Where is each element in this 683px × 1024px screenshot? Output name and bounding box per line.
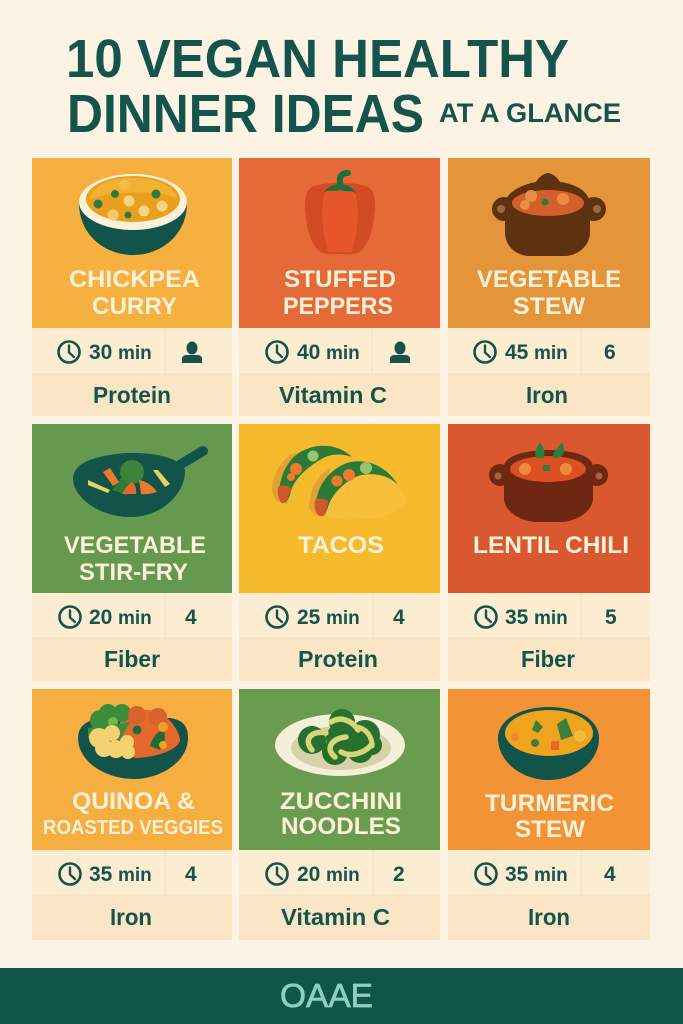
name: TURMERIC [485, 790, 614, 817]
name [280, 788, 402, 840]
servings: 4 [393, 606, 405, 629]
servings: 4 [185, 863, 197, 886]
icon: zucchini plate [275, 709, 405, 776]
name: VEGETABLE [477, 266, 621, 293]
name: STEW [515, 816, 585, 843]
time: 35 [505, 863, 528, 886]
time: min [118, 608, 152, 629]
nutrient: Protein [93, 382, 171, 408]
icon: quinoa bowl [78, 704, 188, 779]
time [266, 606, 360, 629]
name [485, 790, 614, 843]
title: DINNER IDEAS [67, 84, 424, 144]
name: PEPPERS [283, 293, 393, 320]
nutrient: Fiber [521, 646, 575, 672]
time [60, 863, 152, 886]
time [476, 606, 568, 629]
icon: red pepper [305, 173, 375, 254]
time [476, 863, 568, 886]
name: STEW [513, 293, 585, 320]
servings: 4 [604, 863, 616, 886]
footer [0, 968, 683, 1024]
name: CURRY [92, 293, 177, 320]
time: 25 [297, 606, 320, 629]
card: stuffed peppers [239, 158, 440, 416]
time: 35 [89, 863, 112, 886]
name: NOODLES [281, 813, 401, 840]
icon: stew pot [492, 173, 606, 256]
name: LENTIL CHILI [473, 532, 629, 559]
name: STUFFED [284, 266, 396, 293]
icon: curry bowl [79, 174, 187, 255]
name [64, 532, 206, 586]
nutrient: Protein [298, 646, 378, 672]
servings: 5 [605, 606, 617, 629]
time [58, 341, 152, 364]
name: QUINOA & [72, 788, 195, 815]
title: 10 VEGAN HEALTHY [66, 29, 569, 89]
card: quinoa and roasted veggies [32, 689, 232, 940]
nutrient: Fiber [104, 646, 160, 672]
time: min [534, 343, 568, 364]
icon: turmeric bowl [498, 707, 599, 780]
servings: 4 [185, 606, 197, 629]
icon: chili pot [489, 442, 608, 522]
name: ZUCCHINI [280, 788, 402, 815]
time [474, 341, 568, 364]
time: 30 [89, 341, 112, 364]
card: zucchini noodles [239, 689, 440, 940]
card: vegetable stir-fry [32, 424, 232, 681]
name: ROASTED VEGGIES [43, 817, 223, 839]
time: min [326, 608, 360, 629]
time: min [326, 865, 360, 886]
time: 45 [505, 341, 528, 364]
name: VEGETABLE [64, 532, 206, 559]
time: min [118, 865, 152, 886]
time [266, 341, 360, 364]
card: turmeric stew [448, 689, 650, 940]
time: min [534, 608, 568, 629]
name: STIR-FRY [79, 559, 188, 586]
time: 40 [297, 341, 320, 364]
title: AT A GLANCE [439, 98, 621, 128]
card: tacos [239, 424, 440, 681]
title [66, 29, 621, 144]
icon: wok [73, 451, 203, 517]
nutrient: Iron [526, 382, 568, 408]
time: 20 [297, 863, 320, 886]
card: lentil chili [448, 424, 650, 681]
card: vegetable stew [448, 158, 650, 416]
servings icon [390, 342, 410, 363]
servings: 6 [604, 341, 616, 364]
name [477, 266, 621, 320]
time [266, 863, 360, 886]
name: CHICKPEA [69, 266, 200, 293]
name [283, 266, 396, 320]
time [60, 606, 152, 629]
time: min [534, 865, 568, 886]
name [43, 788, 223, 839]
nutrient: Iron [110, 904, 152, 930]
nutrient: Vitamin C [279, 382, 387, 408]
servings icon [182, 342, 202, 363]
time: 20 [89, 606, 112, 629]
time: min [118, 343, 152, 364]
name [69, 266, 200, 320]
nutrient: Vitamin C [281, 904, 390, 930]
name: TACOS [298, 532, 384, 559]
icon: tacos [272, 446, 405, 519]
nutrient: Iron [528, 904, 570, 930]
footer brand: OAAE [280, 977, 373, 1014]
servings: 2 [393, 863, 405, 886]
card: chickpea curry [32, 158, 232, 416]
time: 35 [505, 606, 528, 629]
time: min [326, 343, 360, 364]
